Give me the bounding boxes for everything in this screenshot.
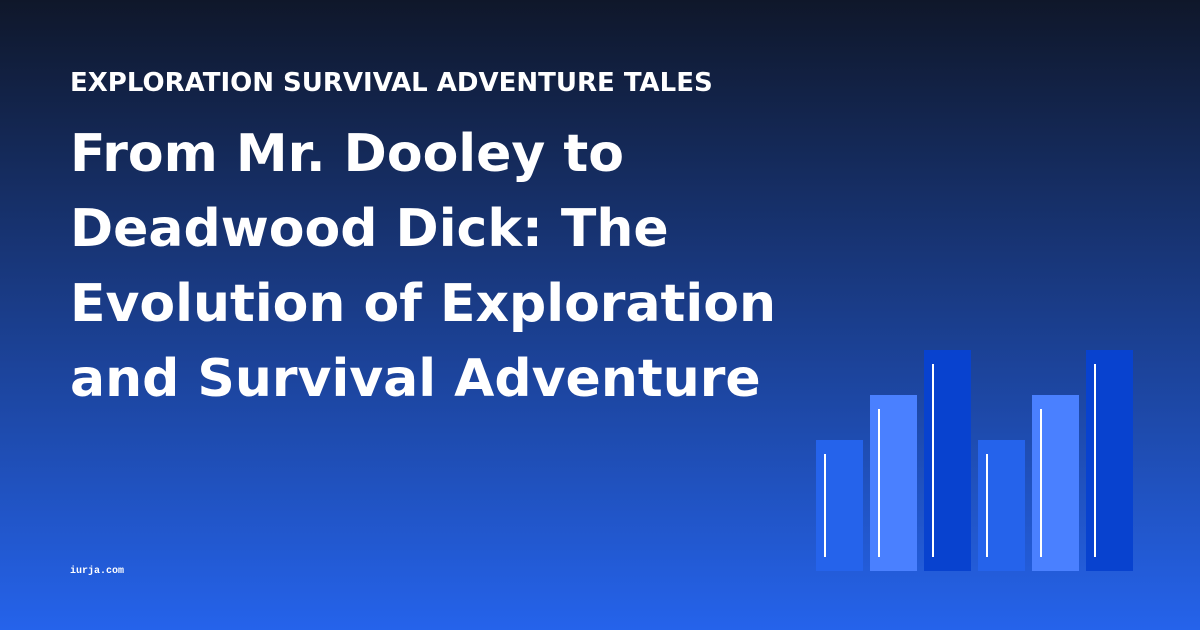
title: From Mr. Dooley to [70,124,624,184]
title: Evolution of Exploration [70,274,776,334]
title: Deadwood Dick: The [70,199,669,259]
footer domain: iurja.com [70,566,124,577]
title [70,124,776,409]
title: and Survival Adventure [70,349,761,409]
bar chart illustration [816,350,1133,571]
eyebrow heading: EXPLORATION SURVIVAL ADVENTURE TALES [70,68,713,98]
